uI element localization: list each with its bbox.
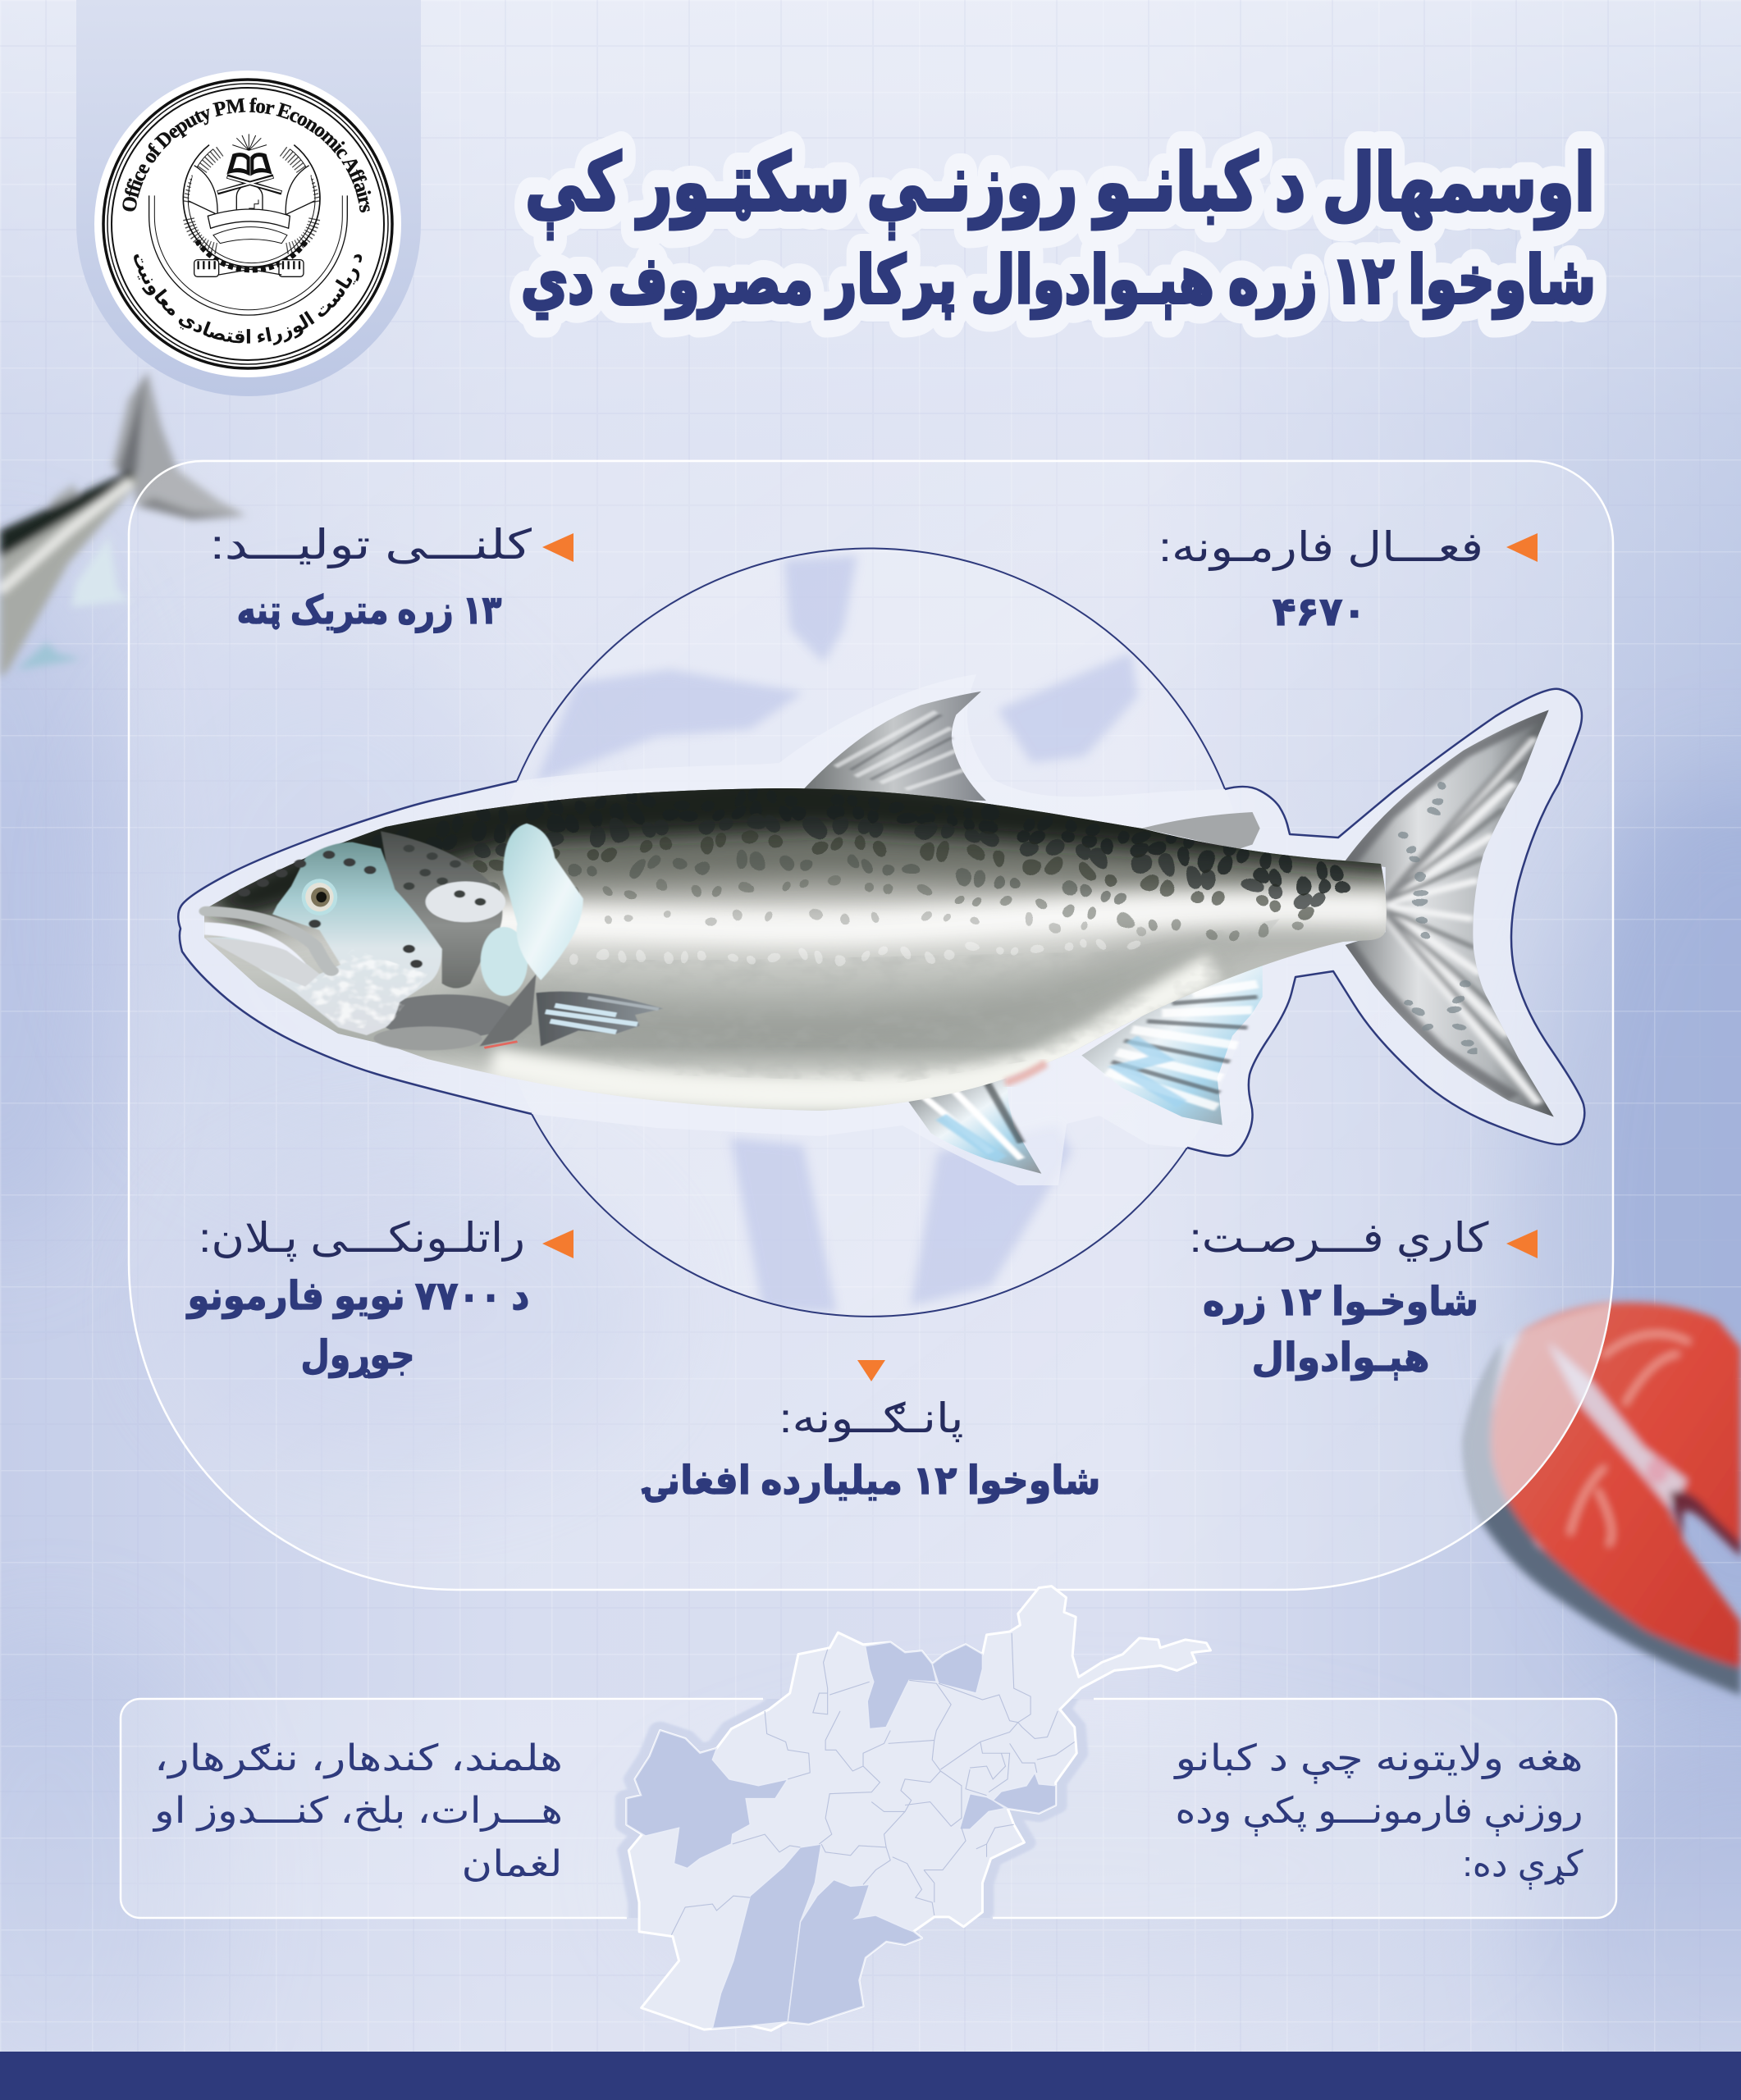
background circle behind the fish [487, 549, 1254, 1317]
map of Afghanistan [627, 1586, 1211, 2030]
pectoral base plate [503, 824, 583, 980]
ventral fin [901, 1078, 1041, 1174]
provinces list text: هـــرات، بلخ، کنـــدوز او [153, 1791, 563, 1832]
value: ۱۳ زره متریک ټنه [236, 589, 502, 633]
dark spots [386, 799, 1343, 958]
highlighted provinces [627, 1642, 1056, 2029]
provinces intro text: هغه ولایتونه چې د کبانو [1173, 1738, 1583, 1784]
blurred salmon steak, right [1465, 1303, 1741, 1696]
value line 1: د ۷۷۰۰ نویو فارمونو [186, 1275, 530, 1319]
tail fin [1346, 710, 1554, 1117]
stat: job opportunities [1190, 1215, 1538, 1381]
fish halo outline [178, 674, 1584, 1185]
salmon illustration [197, 692, 1554, 1174]
adipose fin [1142, 812, 1260, 849]
arrow [857, 1360, 885, 1381]
eye [302, 879, 337, 915]
logo emblem [149, 134, 347, 315]
lower info box [121, 1699, 1616, 1918]
value line 2: هېـوادوال [1252, 1336, 1429, 1381]
arrow [542, 533, 573, 562]
stat: active farms [1158, 524, 1538, 634]
map outline [627, 1586, 1211, 2030]
value line 1: شاوخـوا ۱۲ زره [1203, 1281, 1478, 1325]
scale texture [459, 919, 1280, 1083]
lower throat [373, 1026, 482, 1050]
snout top spots [244, 855, 418, 968]
belly red blush [1005, 1063, 1046, 1083]
provinces intro text: کړې ده: [1462, 1844, 1583, 1890]
label: پانـګــونه: [779, 1395, 963, 1442]
provinces list text: هلمند، کندهار، ننګرهار، [154, 1738, 563, 1779]
stat: total production [210, 522, 573, 633]
stat: investment [642, 1360, 1101, 1504]
lower jaw [204, 938, 319, 987]
value: ۴۶۷۰ [1273, 591, 1366, 634]
title [521, 139, 1596, 319]
value line 2: جوړول [300, 1334, 415, 1378]
title line 2: شاوخوا ۱۲ زره هېـوادوال پرکار مصروف دي [521, 244, 1596, 319]
small ventral plate [481, 927, 528, 996]
logo backing column [76, 0, 421, 396]
anal fin [1081, 965, 1263, 1125]
provinces intro text: روزنې فارمونـــو پکې وده [1175, 1791, 1583, 1837]
arrow [1506, 533, 1538, 562]
provinces list text: لغمان [461, 1844, 563, 1884]
logo pashto text: د ریاست الوزراء اقتصادي معاونیت [134, 254, 362, 346]
fish body [197, 767, 1395, 1116]
label: کاري فـــرصـت: [1190, 1215, 1489, 1262]
main panel [129, 461, 1741, 1614]
label: کلنـــی تولیـــد: [210, 522, 532, 568]
arrow [1506, 1230, 1538, 1258]
blurred fish, top left [0, 372, 246, 678]
pale gill patch [426, 881, 505, 922]
mouth gap [204, 922, 305, 970]
title halo: شاوخوا ۱۲ زره هېـوادوال پرکار مصروف دي [521, 244, 1596, 319]
upper jaw [207, 911, 331, 971]
stat: future plan [186, 1215, 573, 1378]
provinces list text [153, 1738, 563, 1884]
dark wedge [480, 974, 536, 1046]
logo seal [94, 71, 401, 377]
dorsal fin [801, 692, 986, 801]
title halo [521, 139, 1596, 319]
red gill mark [484, 1042, 517, 1048]
gill spots [409, 848, 484, 902]
value: شاوخوا ۱۲ میلیارده افغانۍ [642, 1459, 1101, 1504]
fish head [204, 824, 663, 1050]
arrow [542, 1230, 573, 1258]
cheek mottling [258, 949, 427, 1030]
logo english text: Office of Deputy PM for Economic Affairs [122, 98, 371, 212]
gill cover [381, 831, 502, 988]
bottom bar [0, 2052, 1741, 2100]
pectoral fin [536, 992, 663, 1046]
label: راتلـونکـــی پـلان: [199, 1215, 525, 1262]
cheek plate [207, 842, 442, 1035]
lower jaw throat [376, 994, 517, 1039]
label: فعـــال فارمـونه: [1158, 524, 1483, 571]
fish fins [801, 692, 1554, 1174]
provinces intro text [1173, 1738, 1583, 1890]
